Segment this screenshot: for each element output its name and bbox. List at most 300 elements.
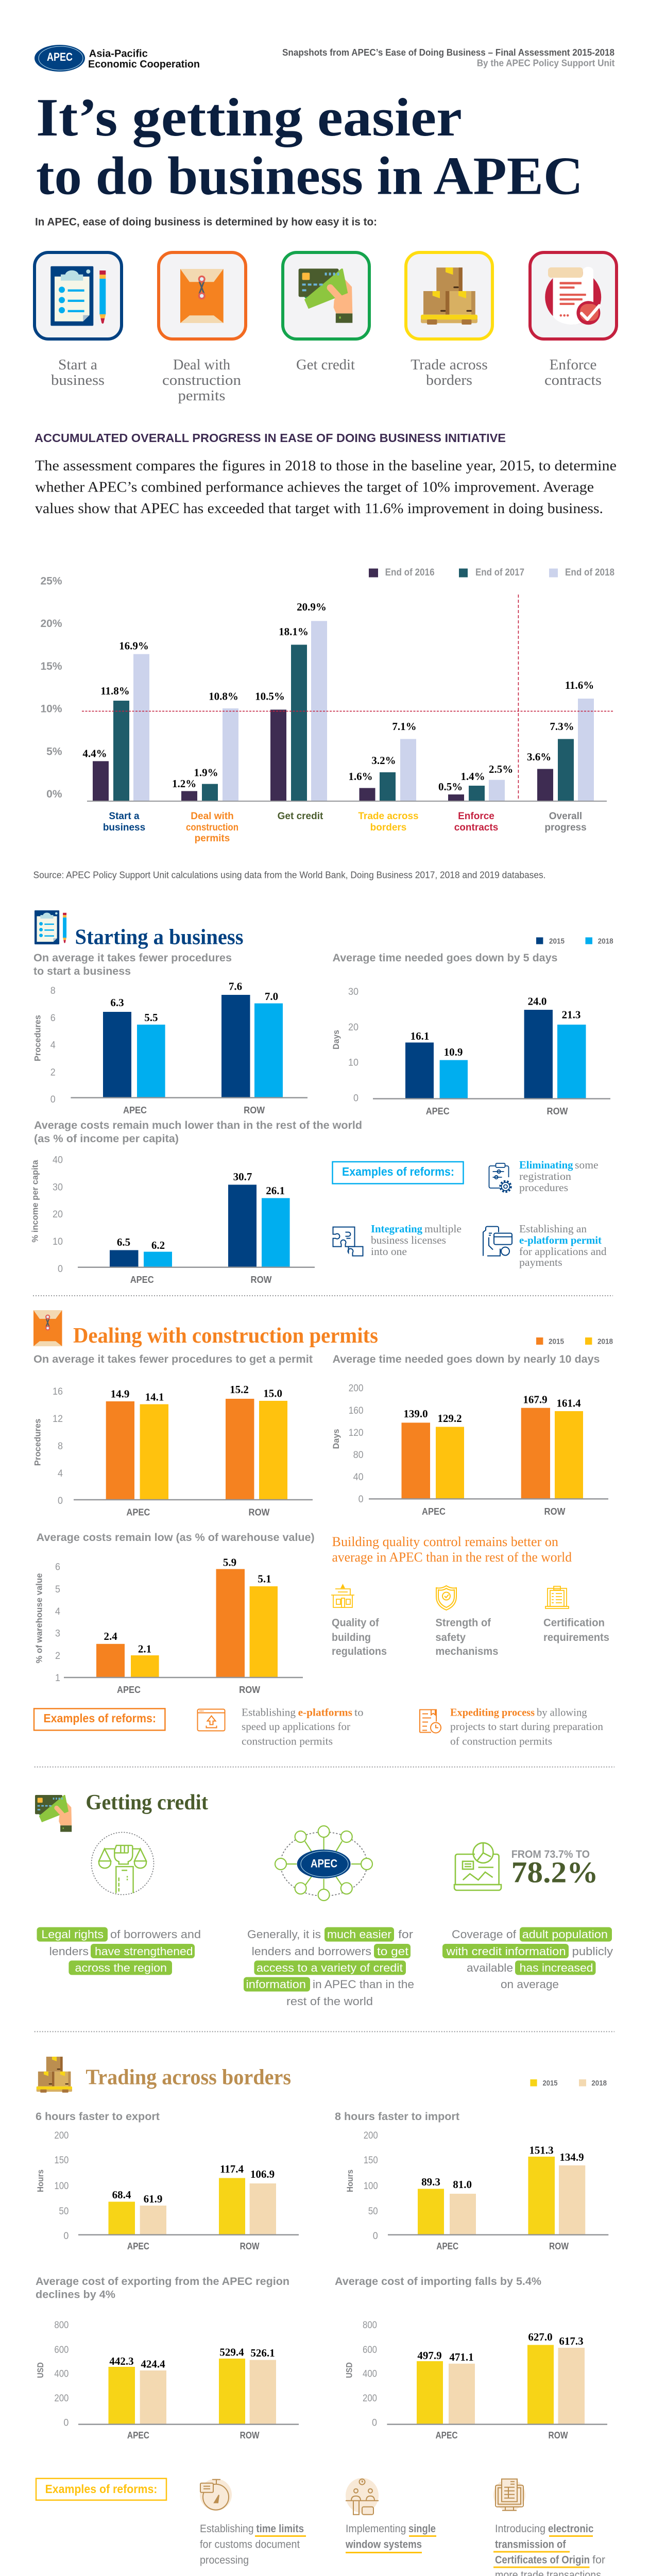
bar chart: export hours: 100	[54, 2181, 69, 2192]
callout: examples of reforms: Examples of reforms:	[342, 1165, 454, 1178]
reform: eliminating procedures: registration	[519, 1170, 572, 1182]
reform: single window: window systems	[345, 2538, 422, 2550]
bar chart: import hours: 151.3	[529, 2144, 554, 2157]
bar chart: export hours: 50	[59, 2206, 69, 2217]
text: coverage: has increased	[520, 1961, 593, 1974]
panel: deal with construction permits: Deal with	[173, 357, 230, 373]
progress paragraph: The assessment compares the figures in 2018 to those in the baseline year, 2015, to determine	[35, 457, 617, 474]
callout: examples of reforms (construction): Examples of reforms:	[43, 1711, 156, 1725]
text: easier access: in APEC than in the	[313, 1978, 414, 1991]
bar chart: export hours: 150	[54, 2155, 69, 2166]
label: quality of building regulations: building	[332, 1632, 371, 1643]
label: strength of safety mechanisms: Strength of	[435, 1617, 491, 1629]
reform: expediting process: Expediting process	[450, 1706, 535, 1719]
chart heading: procedures: On average it takes fewer procedures	[33, 952, 232, 964]
category labels: construction	[186, 822, 238, 833]
category labels: contracts	[454, 822, 498, 833]
value labels: 10.5%	[255, 690, 285, 703]
chart heading: procedures	[33, 952, 232, 977]
panel: building quality control	[331, 1534, 609, 1657]
value labels: 18.1%	[279, 625, 309, 638]
reform: e-platforms: construction permits	[242, 1735, 333, 1748]
APEC logo: APEC	[47, 50, 73, 63]
value labels: 3.6%	[527, 751, 551, 763]
bar chart: import cost	[344, 2320, 607, 2441]
text: legal rights: lenders	[49, 1945, 89, 1958]
chart heading: export cost: Average cost of exporting from the APEC region	[36, 2276, 289, 2287]
bar chart: procedures to start a business: 7.0	[265, 990, 278, 1003]
reform: time limits	[200, 2479, 306, 2566]
bar chart: procedures to start a business: 4	[50, 1040, 56, 1051]
bar chart: permit cost: 5.1	[258, 1572, 271, 1585]
category labels	[103, 811, 587, 844]
bar chart: export cost: 600	[54, 2345, 69, 2355]
bar chart: import hours: 81.0	[453, 2178, 472, 2191]
bar chart: days to start a business: 30	[348, 987, 358, 997]
heading: trading across borders: Trading across borders	[86, 2065, 291, 2089]
text: easier access: to get	[377, 1945, 408, 1958]
category labels: Trade across	[358, 811, 419, 822]
category labels: Deal with	[191, 811, 234, 822]
bar chart: accumulated overall progress	[40, 567, 614, 844]
chart heading: import cost: Average cost of importing falls by 5.4%	[335, 2276, 541, 2287]
chart heading: export hours: 6 hours faster to export	[36, 2111, 160, 2123]
y axis: 20%	[40, 618, 62, 630]
bar chart: import hours: 134.9	[559, 2151, 584, 2163]
category labels: borders	[370, 822, 406, 833]
chart heading: export cost: declines by 4%	[36, 2289, 115, 2301]
icon: APEC network	[275, 1826, 372, 1901]
label: certification requirements	[543, 1617, 609, 1643]
bar chart: permit cost: 2	[55, 1651, 60, 1662]
bar chart: days to start a business: 10.9	[444, 1046, 463, 1058]
panel: get credit: Get credit	[296, 357, 355, 373]
callout: examples of reforms (trade)	[36, 2479, 166, 2500]
text: easier access: rest of the world	[286, 1995, 373, 2008]
icon: credit coverage laptop	[454, 1843, 501, 1890]
legend: starting a business: 2015	[549, 937, 565, 946]
panel: trade across borders: borders	[426, 372, 472, 388]
panel: trade across borders: Trade across	[411, 357, 488, 373]
legend: construction	[536, 1337, 613, 1346]
text: legal rights: Legal rights	[41, 1928, 104, 1941]
text: easier access: information	[246, 1978, 306, 1991]
bar chart: permit procedures: 14.9	[111, 1388, 129, 1400]
bar chart: days to start a business: ROW	[547, 1106, 568, 1116]
label: quality of building regulations: regulations	[332, 1646, 387, 1657]
y axis: 25%	[40, 575, 62, 587]
chart heading: export cost	[36, 2276, 289, 2301]
bar chart: export hours: ROW	[240, 2241, 260, 2251]
panel: start a business	[35, 252, 122, 388]
bar chart: cost to start a business: ROW	[250, 1275, 272, 1285]
bar chart: procedures to start a business: 0	[50, 1094, 56, 1105]
bar chart: import cost: 800	[363, 2320, 377, 2331]
bar chart: import hours: 200	[364, 2130, 378, 2141]
bar chart: import hours: 0	[373, 2231, 378, 2242]
bar chart: days to start a business: Days	[331, 1030, 341, 1049]
reform: eliminating procedures: some	[575, 1159, 599, 1171]
reform: time limits: processing	[200, 2554, 249, 2566]
reform: electronic certificates: transmission of	[495, 2538, 566, 2550]
reform: expediting process: projects to start during preparation	[450, 1720, 604, 1733]
text: coverage: on average	[501, 1978, 559, 1991]
bar chart: permit cost: 3	[55, 1629, 60, 1639]
panel: building quality control: average in APEC than in the rest of the world	[332, 1550, 572, 1565]
reform: e-platform permit	[483, 1223, 607, 1268]
bar chart: permit cost	[34, 1556, 303, 1695]
chart heading: procedures: to start a business	[33, 965, 131, 977]
bar chart: export hours: 0	[63, 2231, 69, 2242]
callout: examples of reforms (construction)	[34, 1708, 165, 1730]
bar chart: days to start a business: 0	[353, 1093, 358, 1104]
bar chart: import hours	[345, 2130, 608, 2251]
bar chart: export cost: USD	[36, 2362, 45, 2378]
heading: starting a business: Starting a business	[75, 926, 243, 950]
bar chart: permit procedures: ROW	[248, 1507, 270, 1517]
reform: electronic certificates: Certificates of Origin	[495, 2554, 590, 2566]
icon: envelope small	[33, 1310, 62, 1346]
legend: End of 2017	[475, 567, 524, 578]
bar chart: days to start a business	[331, 987, 610, 1116]
value labels: 4.4%	[82, 747, 107, 759]
panel: get credit	[283, 252, 369, 373]
label: quality of building regulations	[332, 1617, 387, 1657]
title: to do business in APEC	[36, 145, 583, 206]
bar chart: cost to start a business: 30	[53, 1182, 63, 1193]
bar chart: export hours: 68.4	[112, 2189, 131, 2201]
panel: deal with construction permits: construction	[162, 372, 241, 388]
legend: End of 2018	[565, 567, 614, 578]
reform: e-platform permit: Establishing an	[519, 1223, 587, 1235]
bar chart: import cost: 627.0	[528, 2331, 553, 2343]
reform: integrating licenses: into one	[371, 1245, 407, 1258]
bar chart: cost to start a business: 0	[58, 1264, 63, 1275]
panel: enforce contracts: Enforce	[550, 357, 596, 373]
bar chart: export cost: 800	[54, 2320, 69, 2331]
bar chart: export hours: 200	[54, 2130, 69, 2141]
panel: start a business: business	[51, 372, 105, 388]
category labels: Start a	[109, 811, 140, 822]
reform: expediting process: by allowing	[537, 1706, 587, 1719]
callout: examples of reforms (trade): Examples of reforms:	[45, 2482, 157, 2496]
bar chart: import hours: 100	[364, 2181, 378, 2192]
icon: APEC network: APEC	[311, 1857, 337, 1870]
bar chart: export cost: 526.1	[250, 2347, 275, 2359]
legend: trading	[530, 2079, 607, 2088]
intro line: In APEC, ease of doing business is determined by how easy it is to:	[35, 216, 377, 228]
bar chart: export cost: 424.4	[141, 2358, 165, 2370]
value labels: 16.9%	[119, 640, 149, 652]
text: easier access: for	[398, 1928, 413, 1941]
bar chart: cost to start a business: 6.5	[117, 1236, 130, 1248]
text: coverage: publicly	[572, 1945, 613, 1958]
bar chart: permit cost: 5	[55, 1584, 60, 1595]
bar chart: permit cost: 1	[55, 1673, 60, 1684]
bar chart: import hours: APEC	[436, 2241, 458, 2251]
category labels: Get credit	[278, 811, 323, 822]
reform: electronic certificates: electronic	[548, 2523, 594, 2535]
label: quality of building regulations: Quality of	[332, 1617, 380, 1629]
bar chart: permit cost: ROW	[239, 1685, 260, 1695]
bar chart: import cost: APEC	[436, 2430, 457, 2441]
value labels: 11.8%	[100, 685, 130, 697]
bar chart: cost to start a business: 10	[53, 1236, 63, 1247]
panel: enforce contracts: contracts	[544, 372, 602, 388]
bar chart: cost to start a business: APEC	[130, 1275, 154, 1285]
bar chart: permit days: 120	[349, 1428, 364, 1438]
callout: examples of reforms	[333, 1162, 464, 1184]
reform: single window: Implementing	[346, 2523, 406, 2535]
y axis: 5%	[46, 746, 62, 757]
value labels	[82, 601, 594, 793]
reform: e-platforms: Establishing	[242, 1706, 296, 1719]
bar chart: export cost: 200	[54, 2393, 69, 2404]
bar chart: cost to start a business: 26.1	[266, 1184, 285, 1197]
heading: getting credit: Getting credit	[86, 1791, 208, 1815]
bar chart: procedures to start a business: 7.6	[229, 980, 242, 992]
value labels: 0.5%	[438, 781, 463, 793]
category labels: progress	[544, 822, 587, 833]
legend	[369, 567, 614, 578]
bar chart: import cost: 617.3	[559, 2335, 584, 2347]
category labels: permits	[195, 833, 230, 844]
icon: boxes small	[37, 2057, 72, 2093]
reform: e-platform permit: for applications and	[519, 1245, 607, 1258]
bar chart: permit cost: 4	[55, 1606, 60, 1617]
stat: credit coverage: FROM 73.7% TO	[511, 1849, 590, 1860]
reform: eliminating procedures	[489, 1159, 599, 1194]
bar chart: cost to start a business	[30, 1155, 315, 1285]
category labels: Overall	[549, 811, 582, 822]
bar chart: export cost: 442.3	[109, 2355, 134, 2367]
value labels: 2.5%	[489, 763, 513, 775]
reform: single window: single	[408, 2523, 436, 2535]
bar chart: permit procedures: 16	[53, 1386, 63, 1397]
bar chart: permit days: 167.9	[523, 1393, 548, 1405]
text: easier access: Generally, it is	[247, 1928, 321, 1941]
value labels: 7.1%	[392, 720, 417, 733]
text: legal rights: across the region	[75, 1961, 167, 1974]
progress paragraph: values show that APEC has exceeded that target with 11.6% improvement in doing business.	[35, 500, 603, 517]
reform: expediting process	[420, 1706, 604, 1748]
chart heading: time: Average time needed goes down by 5 days	[333, 952, 557, 964]
legend: construction: 2018	[597, 1337, 613, 1346]
reform: integrating licenses	[333, 1223, 462, 1258]
reform: integrating licenses: multiple	[424, 1223, 462, 1235]
text: easier access: access to a variety of credit	[257, 1961, 403, 1974]
bar chart: import cost: 0	[372, 2417, 377, 2429]
bar chart: import hours: 50	[368, 2206, 378, 2217]
value labels: 1.2%	[172, 777, 196, 790]
text: legal rights: of borrowers and	[110, 1928, 201, 1941]
panel: start a business: Start a	[58, 357, 98, 373]
y axis: 0%	[46, 788, 62, 800]
bar chart: import cost: 497.9	[417, 2349, 442, 2362]
text: easier access: lenders and borrowers	[252, 1945, 371, 1958]
header credits: Snapshots from APEC’s Ease of Doing Business – Final Assessment 2015-2018	[282, 47, 614, 58]
icon: building regulations	[331, 1585, 354, 1607]
icon: certification	[545, 1586, 569, 1608]
bar chart: export hours: APEC	[127, 2241, 149, 2251]
reform: time limits: time limits	[256, 2523, 304, 2535]
value labels: 10.8%	[209, 690, 238, 703]
value labels: 1.9%	[194, 767, 218, 779]
reform: e-platforms	[198, 1706, 364, 1748]
bar chart: export cost: 529.4	[219, 2346, 244, 2358]
value labels: 1.6%	[348, 770, 373, 783]
bar chart: permit procedures: 0	[58, 1496, 63, 1506]
bar chart: permit cost: 5.9	[223, 1556, 236, 1568]
bar chart: procedures to start a business: 8	[50, 986, 56, 996]
value labels: 11.6%	[565, 679, 594, 691]
reform: electronic certificates	[493, 2479, 605, 2576]
bar chart: permit procedures: 4	[58, 1468, 63, 1479]
bar chart: import cost: 400	[363, 2369, 377, 2380]
label: strength of safety mechanisms: mechanisms	[435, 1646, 498, 1657]
bar chart: permit procedures: 12	[53, 1414, 63, 1425]
panel: enforce contracts	[530, 252, 617, 388]
bar chart: days to start a business: 16.1	[411, 1030, 429, 1042]
bar chart: export hours: Hours	[36, 2170, 45, 2192]
bar chart: days to start a business: 21.3	[562, 1009, 580, 1021]
y axis: 10%	[40, 703, 62, 715]
bar chart: permit days: 80	[353, 1450, 364, 1461]
bar chart: permit procedures: 15.0	[263, 1387, 282, 1399]
APEC logo: Asia-Pacific	[89, 48, 148, 60]
header credits: By the APEC Policy Support Unit	[477, 58, 614, 69]
text: easier access: much easier	[327, 1928, 391, 1941]
text: legal rights: have strengthened	[95, 1945, 193, 1958]
reform: e-platforms: to	[354, 1706, 364, 1719]
progress paragraph	[35, 457, 617, 517]
chart heading: cost: (as % of income per capita)	[34, 1133, 179, 1145]
text: coverage: with credit information	[446, 1945, 566, 1958]
text: coverage: adult population	[522, 1928, 608, 1941]
bar chart: import hours: 150	[364, 2155, 378, 2166]
bar chart: export hours: 106.9	[250, 2168, 275, 2180]
legend: trading: 2015	[543, 2079, 557, 2088]
bar chart: export hours	[36, 2130, 299, 2251]
text: easier access	[244, 1927, 414, 2008]
bar chart: permit procedures	[33, 1383, 313, 1517]
bar chart: import hours: 89.3	[421, 2176, 440, 2188]
value labels: 3.2%	[371, 754, 396, 767]
label: strength of safety mechanisms	[435, 1617, 498, 1657]
bar chart: export cost: 400	[54, 2369, 69, 2380]
source note: Source: APEC Policy Support Unit calculations using data from the World Bank, Doing Business 2017, 2018 and 2019 databases.	[33, 870, 546, 880]
text: coverage	[442, 1927, 613, 1991]
bar chart: export cost: APEC	[127, 2430, 149, 2441]
reform: eliminating procedures: procedures	[519, 1181, 568, 1194]
bar chart: permit cost: APEC	[117, 1685, 141, 1695]
heading: dealing with construction permits: Dealing with construction permits	[73, 1324, 378, 1348]
bar chart: permit days: 160	[349, 1405, 364, 1416]
reform: electronic certificates: Introducing	[495, 2523, 545, 2535]
bar chart: permit days: Days	[331, 1429, 341, 1449]
progress heading: ACCUMULATED OVERALL PROGRESS IN EASE OF DOING BUSINESS INITIATIVE	[35, 431, 506, 445]
bar chart: procedures to start a business: ROW	[244, 1105, 265, 1115]
text: legal rights	[37, 1927, 201, 1975]
bar chart: cost to start a business: 6.2	[151, 1239, 165, 1251]
label: certification requirements: requirements	[543, 1632, 609, 1643]
bar chart: permit procedures: 14.1	[145, 1391, 164, 1403]
legend: starting a business: 2018	[598, 937, 613, 946]
icon: card small	[35, 1795, 72, 1832]
bar chart: days to start a business: 20	[348, 1022, 358, 1033]
reform: time limits: for customs document	[200, 2538, 300, 2550]
chart heading: cost: Average costs remain much lower than in the rest of the world	[34, 1120, 362, 1131]
title: It’s getting easier	[36, 87, 462, 147]
bar chart: import cost: USD	[344, 2362, 354, 2378]
icon: safety shield	[436, 1586, 456, 1610]
reform: expediting process: of construction permits	[450, 1735, 552, 1748]
bar chart: export hours: 117.4	[220, 2163, 244, 2175]
reform: eliminating procedures: Eliminating	[519, 1159, 573, 1171]
bar chart: permit cost: 2.1	[138, 1643, 151, 1655]
value labels: 1.4%	[460, 770, 485, 783]
bar chart: procedures to start a business	[33, 980, 308, 1115]
bar chart: procedures to start a business: 2	[50, 1067, 56, 1078]
bar chart: permit days: 200	[349, 1383, 364, 1394]
legend: trading: 2018	[591, 2079, 607, 2088]
chart heading: permit time: Average time needed goes down by nearly 10 days	[333, 1353, 600, 1365]
bar chart: procedures to start a business: 5.5	[144, 1011, 158, 1024]
bar chart: permit days: 0	[358, 1494, 364, 1505]
reform: integrating licenses: business licenses	[371, 1234, 446, 1246]
legend: End of 2016	[385, 567, 435, 578]
y axis	[40, 575, 62, 800]
chart heading: cost	[34, 1120, 362, 1145]
bar chart: import cost: 200	[363, 2393, 377, 2404]
progress paragraph: whether APEC’s combined performance achieves the target of 10% improvement. Average	[35, 479, 594, 496]
bar chart: permit procedures: 8	[58, 1441, 63, 1452]
bar chart: permit days	[331, 1383, 608, 1517]
bar chart: export cost: 0	[63, 2417, 69, 2429]
label: certification requirements: Certification	[543, 1617, 605, 1629]
panel: building quality control: Building quality control remains better on	[332, 1534, 558, 1549]
text: coverage: Coverage of	[452, 1928, 517, 1941]
bar chart: import hours: Hours	[345, 2170, 355, 2192]
header credits	[282, 47, 614, 69]
bar chart: permit cost: 2.4	[104, 1630, 117, 1642]
bar chart: cost to start a business: 30.7	[233, 1171, 252, 1183]
bar chart: export cost: ROW	[240, 2430, 260, 2441]
reform: integrating licenses: Integrating	[371, 1223, 422, 1235]
legend: construction: 2015	[549, 1337, 564, 1346]
bar chart: permit days: 129.2	[437, 1412, 462, 1425]
bar chart: permit days: ROW	[544, 1506, 566, 1517]
category labels: Enforce	[458, 811, 494, 822]
panel: trade across borders	[406, 252, 492, 388]
stat: credit coverage: 78.2%	[511, 1856, 599, 1889]
panel: deal with construction permits	[159, 252, 246, 404]
bar chart: permit days: APEC	[422, 1506, 446, 1517]
bar chart: import cost: ROW	[548, 2430, 568, 2441]
value labels: 7.3%	[550, 720, 574, 733]
chart heading: import hours: 8 hours faster to import	[335, 2111, 459, 2123]
bar chart: import hours: ROW	[549, 2241, 569, 2251]
reform: time limits: Establishing	[200, 2523, 254, 2535]
category labels: business	[103, 822, 145, 833]
reform: e-platform permit: e-platform permit	[519, 1234, 602, 1246]
bar chart: permit procedures: Procedures	[33, 1419, 42, 1466]
bar chart: procedures to start a business: 6.3	[110, 996, 124, 1009]
bar chart: import cost: 600	[363, 2345, 377, 2355]
APEC logo: Economic Cooperation	[88, 59, 200, 70]
bar chart: procedures to start a business: Procedures	[33, 1015, 42, 1061]
y axis: 15%	[40, 660, 62, 672]
